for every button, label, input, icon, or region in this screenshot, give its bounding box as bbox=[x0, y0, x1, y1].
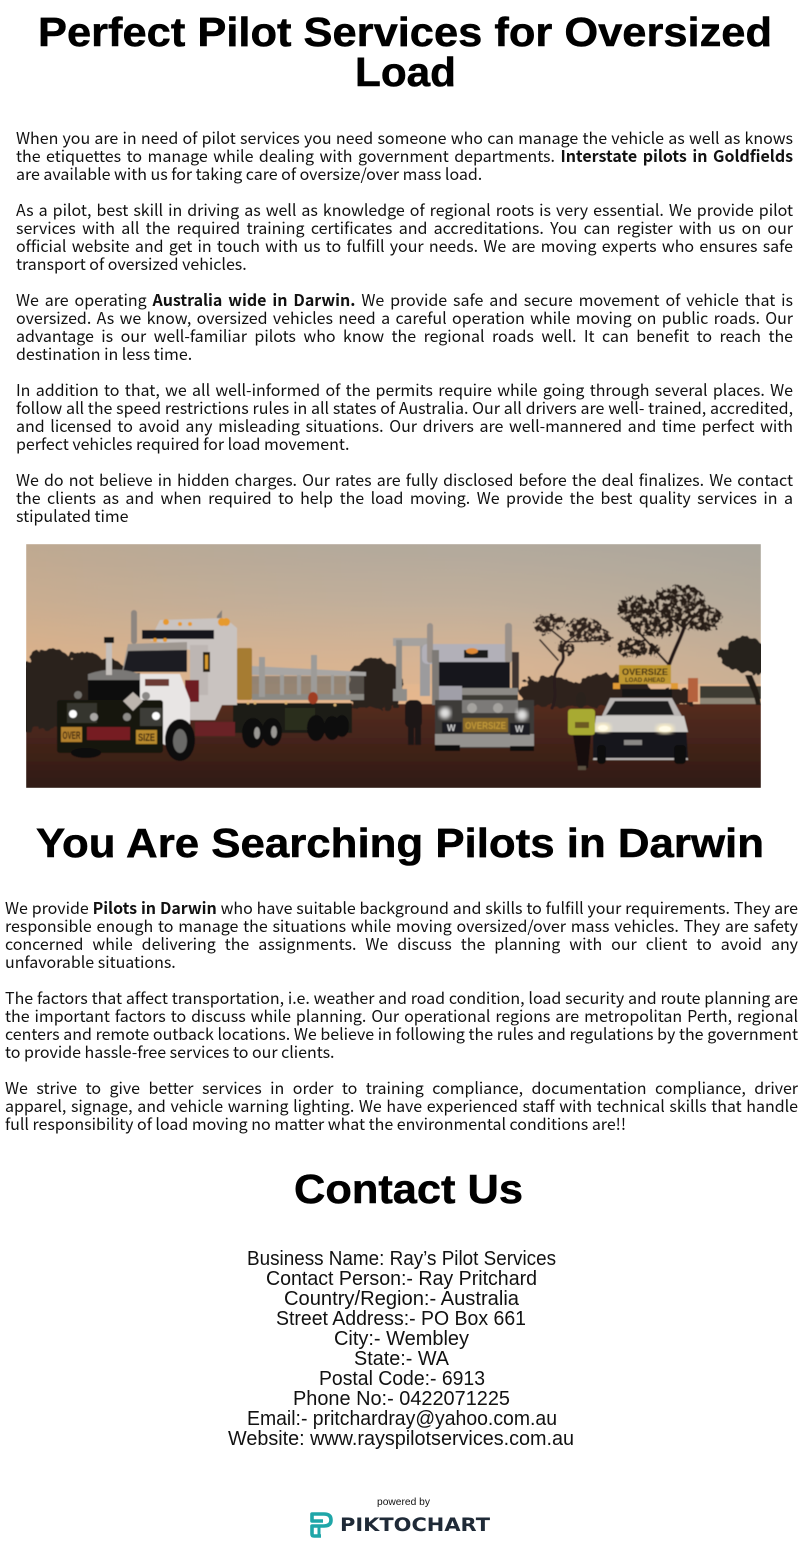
oversize sign: LOAD AHEAD bbox=[625, 678, 666, 684]
text block: intro paragraph bbox=[16, 125, 793, 185]
text block: Pilots in Darwin paragraph bbox=[5, 895, 798, 973]
tree 2 bbox=[620, 610, 700, 665]
heading: Contact Us: Contact Us bbox=[294, 1166, 523, 1212]
title: Perfect Pilot Services for Oversized bbox=[38, 9, 772, 55]
text block: pilot skills paragraph: transport of oversized vehicles. bbox=[16, 251, 247, 275]
text block: intro paragraph: the etiquettes to manage while dealing with government departments. Interstate pilots in Goldfields bbox=[16, 143, 793, 167]
text block: intro paragraph: are available with us for taking care of oversize/over mass load. bbox=[16, 161, 482, 185]
text block: permits paragraph bbox=[16, 377, 793, 455]
text block: Pilots in Darwin paragraph: responsible enough to manage the situations while moving oversized/over mass vehicles. They are safety bbox=[5, 913, 798, 937]
text block: transportation factors paragraph: the important factors to discuss while planning. Our operational regions are metropolitan Perth, regional bbox=[5, 1003, 798, 1027]
text block: compliance paragraph: full responsibility of load moving no matter what the environmental conditions are!! bbox=[5, 1111, 626, 1135]
text block: Australia wide paragraph: destination in less time. bbox=[16, 341, 192, 365]
text block: transportation factors paragraph: The factors that affect transportation, i.e. weather and road condition, load security and route planning are bbox=[5, 985, 798, 1009]
text block: permits paragraph: and licensed to avoid any misleading situations. Our drivers are well-mannered and time perfect with bbox=[16, 413, 793, 437]
contact details: State:- WA bbox=[354, 1348, 450, 1370]
text block: pilot skills paragraph: As a pilot, best skill in driving as well as knowledge of regional roots is very essential. We provide pilot bbox=[16, 197, 793, 221]
text block: pilot skills paragraph bbox=[16, 197, 793, 275]
heading: You Are Searching Pilots in Darwin: You Are Searching Pilots in Darwin bbox=[36, 820, 764, 866]
text block: permits paragraph: In addition to that, we all well-informed of the permits require while going through several places. We bbox=[16, 377, 793, 401]
tree 3 bbox=[745, 675, 761, 705]
text block: compliance paragraph: We strive to give better services in order to training compliance, documentation compliance, driver bbox=[5, 1075, 798, 1099]
contact details bbox=[228, 1248, 574, 1450]
text block: pilot skills paragraph: services with all the required training certificates and accreditations. You can register with us on our bbox=[16, 215, 793, 239]
left treeline bbox=[20, 648, 401, 730]
pilot car bbox=[593, 698, 688, 764]
truck 1 tractor: SIZE bbox=[138, 732, 155, 744]
contact details: Email:- pritchardray@yahoo.com.au bbox=[247, 1408, 557, 1430]
text block: Pilots in Darwin paragraph: concerned while delivering the assignments. We discuss the planning with our client to avoid any bbox=[5, 931, 798, 955]
text block: compliance paragraph bbox=[5, 1075, 798, 1135]
text block: charges paragraph bbox=[16, 467, 793, 527]
contact details: Postal Code:- 6913 bbox=[319, 1368, 485, 1390]
text block: charges paragraph: the clients as and when required to help the load moving. We provide the best quality services in a bbox=[16, 485, 793, 509]
text block: intro paragraph: When you are in need of pilot services you need someone who can manage the vehicle as well as knows bbox=[16, 125, 793, 149]
truck 2: W bbox=[515, 724, 524, 734]
powered by Piktochart logo bbox=[310, 1497, 490, 1538]
text block: transportation factors paragraph: to provide hassle-free services to our clients. bbox=[5, 1039, 334, 1063]
background treeline right bbox=[520, 674, 693, 707]
text block: Pilots in Darwin paragraph: unfavorable situations. bbox=[5, 949, 176, 973]
truck 1 tractor bbox=[57, 610, 336, 761]
oversize sign: OVERSIZE bbox=[622, 667, 668, 678]
text block: transportation factors paragraph: centers and remote outback locations. We believe in following the rules and regulations by the government bbox=[5, 1021, 798, 1045]
contact details: Phone No:- 0422071225 bbox=[293, 1388, 510, 1410]
text block: permits paragraph: follow all the speed restrictions rules in all states of Australia. Our all drivers are well- trained, accredited, bbox=[16, 395, 793, 419]
tree 1 bbox=[540, 625, 610, 708]
text block: Pilots in Darwin paragraph: We provide Pilots in Darwin who have suitable background and skills to fulfill your requirements. They are bbox=[5, 895, 798, 919]
contact details: Street Address:- PO Box 661 bbox=[276, 1308, 526, 1330]
text block: charges paragraph: We do not believe in hidden charges. Our rates are fully disclosed before the deal finalizes. We contact bbox=[16, 467, 793, 491]
text block: charges paragraph: stipulated time bbox=[16, 503, 128, 527]
icon: Piktochart P mark bbox=[312, 1514, 331, 1536]
title: Load bbox=[355, 49, 456, 95]
text block: Australia wide paragraph: advantage is our well-familiar pilots who know the regional roads well. It can benefit to reach the bbox=[16, 323, 793, 347]
powered by Piktochart logo: PIKTOCHART bbox=[340, 1514, 490, 1536]
contact details: Contact Person:- Ray Pritchard bbox=[266, 1268, 537, 1290]
text block: Australia wide paragraph: We are operating Australia wide in Darwin. We provide safe and secure movement of vehicle that is bbox=[16, 287, 793, 311]
truck 2: OVERSIZE bbox=[465, 721, 506, 732]
text block: transportation factors paragraph bbox=[5, 985, 798, 1063]
text block: compliance paragraph: apparel, signage, and vehicle warning lighting. We have experienced staff with technical skills that handle bbox=[5, 1093, 798, 1117]
truck 1 tractor: OVER bbox=[62, 730, 81, 742]
truck 1 trailer bbox=[233, 655, 366, 748]
title bbox=[38, 9, 772, 95]
powered by Piktochart logo: powered by bbox=[377, 1497, 430, 1508]
person by truck bbox=[405, 700, 422, 745]
text block: permits paragraph: perfect vehicles required for load movement. bbox=[16, 431, 349, 455]
contact details: City:- Wembley bbox=[334, 1328, 469, 1350]
contact details: Country/Region:- Australia bbox=[284, 1288, 520, 1310]
pilot in hi-vis vest bbox=[568, 692, 595, 770]
text block: Australia wide paragraph: oversized. As we know, oversized vehicles need a careful operation while moving on public roads. Our bbox=[16, 305, 793, 329]
truck 2: W bbox=[447, 723, 456, 733]
photo: oversize trucks and pilot car at dusk bbox=[26, 544, 761, 788]
text block: pilot skills paragraph: official website and get in touch with us to fulfill your needs. We are moving experts who ensures safe bbox=[16, 233, 793, 257]
contact details: Website: www.rayspilotservices.com.au bbox=[228, 1428, 574, 1450]
truck 2 bbox=[393, 623, 534, 751]
text block: Australia wide paragraph bbox=[16, 287, 793, 365]
oversize sign bbox=[613, 665, 678, 697]
contact details: Business Name: Ray’s Pilot Services bbox=[247, 1248, 556, 1270]
